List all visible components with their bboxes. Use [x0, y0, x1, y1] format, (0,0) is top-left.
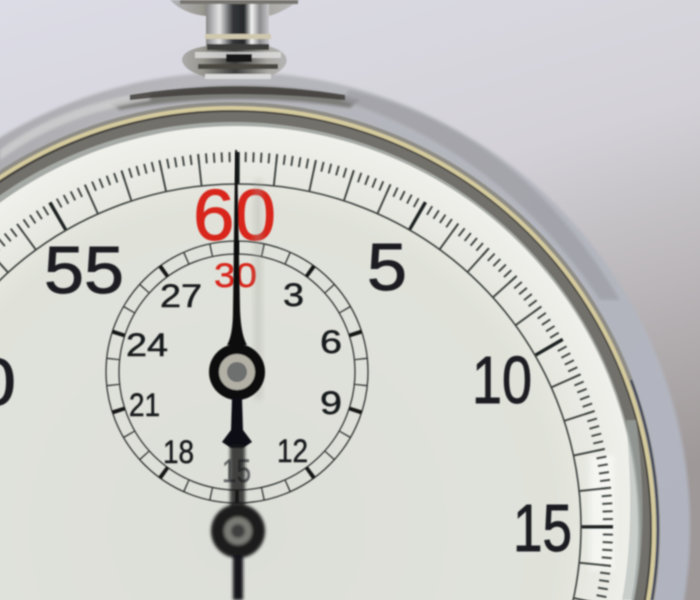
outer minor ticks	[0, 157, 608, 600]
main dial numerals: 60	[193, 176, 276, 256]
lower pivot	[211, 504, 265, 558]
hub silver ring	[219, 354, 255, 390]
sub-dial numerals: 6	[320, 324, 342, 360]
sub-dial heavy ticks	[112, 248, 362, 496]
one second ticks	[0, 168, 597, 600]
seconds hand	[209, 150, 265, 448]
main dial numerals: 10	[472, 343, 532, 418]
sub-dial numerals: 27	[160, 278, 202, 314]
sub-dial numerals: 21	[129, 387, 160, 423]
sub-dial numerals: 15	[222, 453, 251, 489]
hand shadow	[254, 180, 262, 400]
scale inner arc	[0, 184, 581, 600]
sub-dial numerals: 12	[277, 433, 308, 469]
hub centre	[227, 362, 247, 382]
chrome bezel rings	[0, 102, 660, 600]
five second ticks	[0, 168, 597, 600]
blurred lower hand	[211, 445, 265, 600]
crown stem	[130, 0, 345, 100]
sub-dial outer ring	[106, 241, 368, 503]
sub-dial numerals	[126, 257, 342, 489]
sub-dial inner ring	[119, 254, 355, 490]
sub-dial numerals: 3	[283, 277, 304, 313]
sub-dial numerals: 9	[320, 385, 342, 421]
dial face	[0, 126, 643, 600]
hand hub	[209, 344, 265, 400]
main dial numerals: 5	[367, 230, 407, 305]
minutes sub-dial	[106, 241, 368, 503]
sub-dial minute cells	[112, 248, 362, 496]
main dial numerals: 55	[44, 233, 124, 308]
main dial numerals: 15	[513, 491, 572, 566]
sub-dial numerals: 24	[126, 327, 168, 363]
main dial numerals	[0, 176, 572, 566]
main seconds scale	[0, 157, 608, 600]
sub-dial numerals: 18	[163, 434, 194, 470]
sub-dial numerals: 30	[214, 257, 257, 295]
